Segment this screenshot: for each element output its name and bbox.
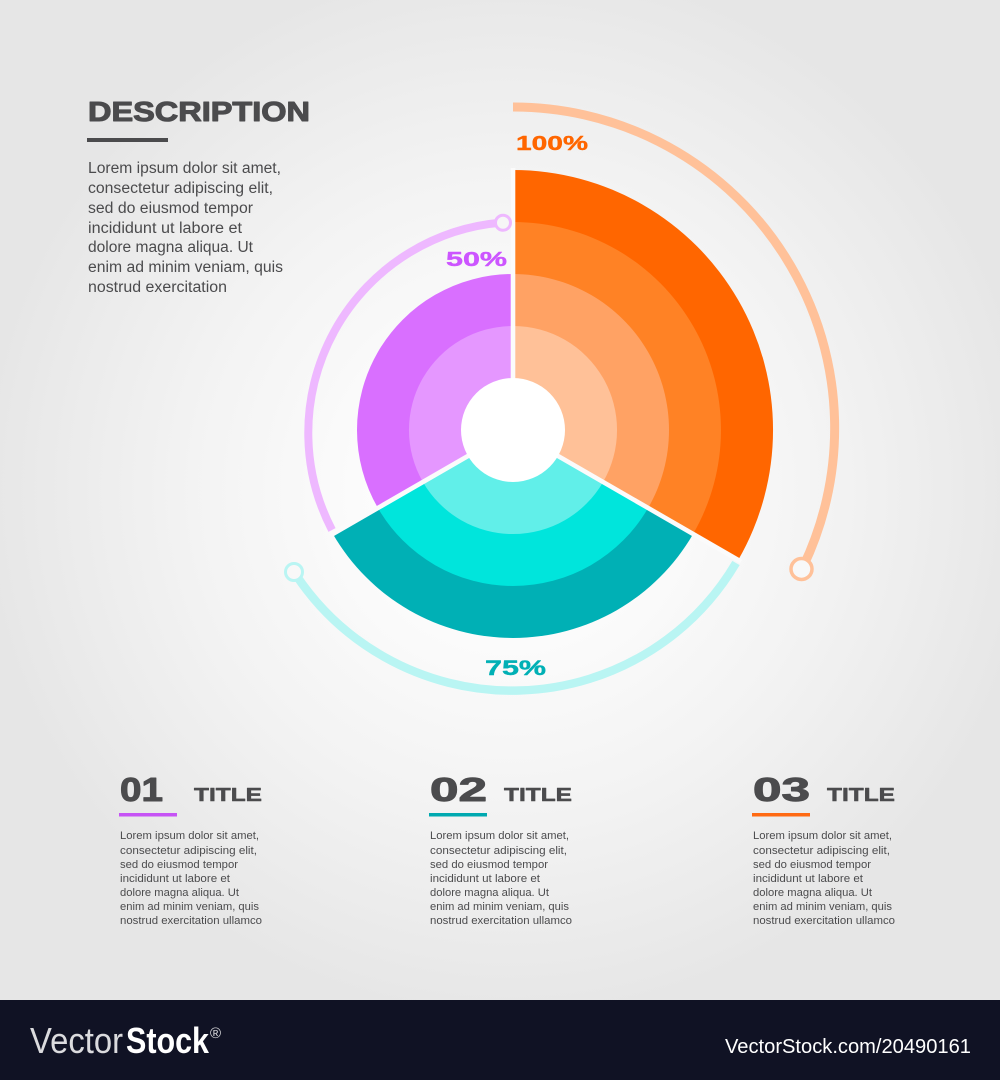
segment separators (330, 168, 741, 562)
underline 03 (752, 813, 810, 816)
title 01: TITLE (194, 785, 262, 805)
text block: description: dolore magna aliqua. Ut (88, 239, 254, 256)
text block: description: incididunt ut labore et (88, 220, 243, 237)
number 03: 03 (753, 771, 810, 808)
text block: description: enim ad minim veniam, quis (88, 259, 283, 276)
text 03: sed do eiusmod tempor (753, 859, 871, 871)
panel: item 03 (752, 771, 895, 927)
text 01 (120, 830, 262, 927)
title 03: TITLE (827, 785, 895, 805)
center hole (461, 378, 565, 482)
arc: teal 75% (286, 563, 736, 691)
text 01: Lorem ipsum dolor sit amet, (120, 830, 259, 842)
label: 75%: 75% (485, 657, 546, 680)
footer logo (30, 1020, 221, 1061)
text 01: enim ad minim veniam, quis (120, 901, 259, 913)
segment: teal 75% (333, 430, 693, 638)
title 02: TITLE (504, 785, 572, 805)
text 03: consectetur adipiscing elit, (753, 845, 890, 857)
text 02 (430, 830, 572, 927)
heading underline (87, 138, 168, 142)
footer logo: Vector (30, 1020, 123, 1061)
heading: description: DESCRIPTION (88, 96, 310, 127)
label: 50%: 50% (446, 249, 507, 271)
segment: purple 50% (357, 274, 513, 508)
footer logo: Stock (126, 1020, 210, 1061)
text 01: dolore magna aliqua. Ut (120, 887, 240, 899)
text 01: consectetur adipiscing elit, (120, 845, 257, 857)
footer logo: ® (210, 1025, 221, 1042)
text block: description (88, 160, 283, 296)
text 02: dolore magna aliqua. Ut (430, 887, 550, 899)
footer bar (0, 1000, 1000, 1080)
text 03: dolore magna aliqua. Ut (753, 887, 873, 899)
arc: purple 50% (308, 215, 510, 530)
text 02: incididunt ut labore et (430, 873, 541, 885)
text 01: nostrud exercitation ullamco (120, 915, 262, 927)
number 01: 01 (120, 771, 163, 808)
text 02: Lorem ipsum dolor sit amet, (430, 830, 569, 842)
arc: orange 100% (513, 107, 835, 580)
text 02: sed do eiusmod tempor (430, 859, 548, 871)
text 02: nostrud exercitation ullamco (430, 915, 572, 927)
text 02: consectetur adipiscing elit, (430, 845, 567, 857)
label: 100%: 100% (516, 133, 588, 155)
text 02: enim ad minim veniam, quis (430, 901, 569, 913)
text 01: incididunt ut labore et (120, 873, 231, 885)
panel: item 02 (429, 771, 572, 927)
underline 01 (119, 813, 177, 816)
text 03 (753, 830, 895, 927)
text 03: nostrud exercitation ullamco (753, 915, 895, 927)
number 02: 02 (430, 771, 487, 808)
text block: description: Lorem ipsum dolor sit amet, (88, 160, 281, 177)
text 03: incididunt ut labore et (753, 873, 864, 885)
footer url: VectorStock.com/20490161 (725, 1036, 971, 1058)
text block: description: nostrud exercitation (88, 279, 227, 296)
text block: description: sed do eiusmod tempor (88, 200, 253, 217)
text 03: Lorem ipsum dolor sit amet, (753, 830, 892, 842)
panel: item 01 (119, 771, 262, 927)
segment: orange 100% (513, 170, 773, 560)
chart: segmented radial pie (330, 168, 773, 638)
text block: description: consectetur adipiscing elit, (88, 180, 273, 197)
text 01: sed do eiusmod tempor (120, 859, 238, 871)
text 03: enim ad minim veniam, quis (753, 901, 892, 913)
underline 02 (429, 813, 487, 816)
